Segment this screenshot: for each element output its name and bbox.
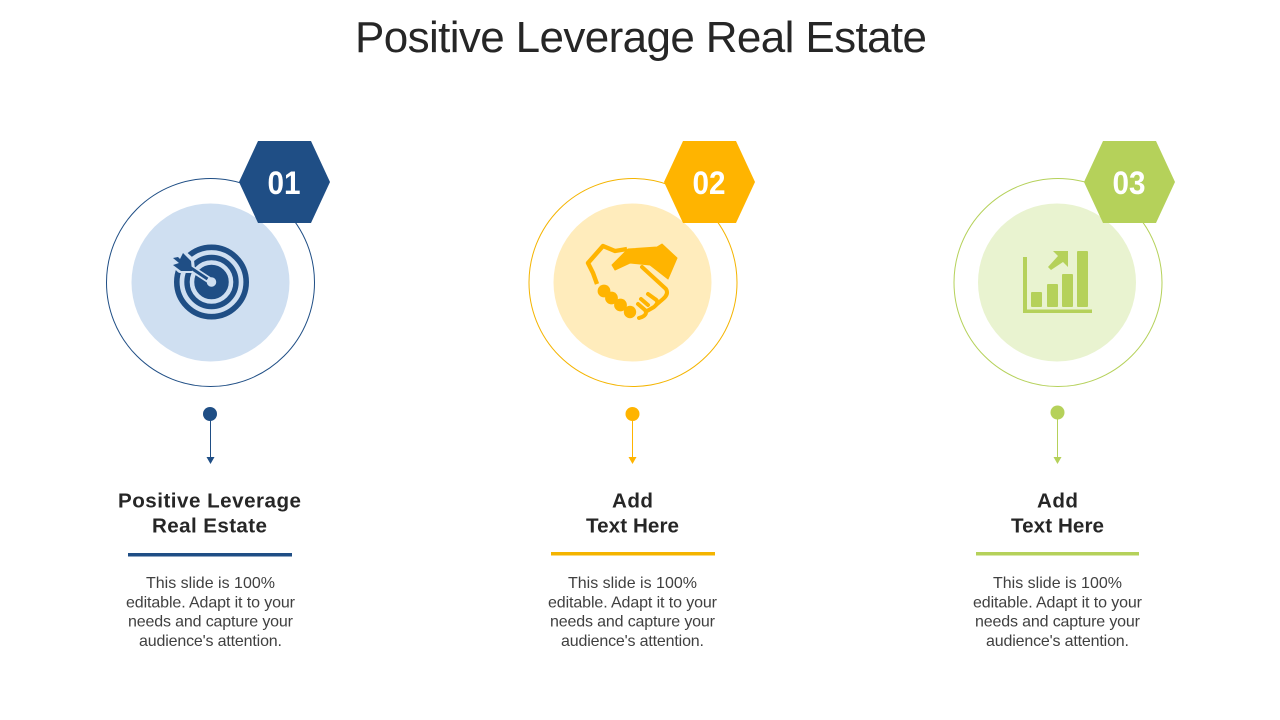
- hexagon badge 01: 01: [268, 165, 300, 201]
- body text 1: editable. Adapt it to your: [126, 594, 296, 612]
- icon: handshake: [588, 244, 677, 318]
- body text 2: audience's attention.: [561, 633, 704, 650]
- body text 1: audience's attention.: [139, 633, 282, 650]
- inner disc 1: [132, 204, 290, 362]
- body text 3: audience's attention.: [986, 633, 1129, 650]
- heading 2: [586, 490, 679, 538]
- hexagon badge 02: 02: [692, 165, 726, 201]
- inner disc 2: [554, 204, 712, 362]
- panel: column 1: [106, 141, 330, 650]
- outer ring 1: [106, 178, 314, 386]
- heading 3: Add: [1037, 490, 1078, 512]
- heading 3: [1011, 490, 1104, 538]
- body text 3: editable. Adapt it to your: [973, 594, 1143, 612]
- heading 2: Text Here: [586, 514, 679, 538]
- heading 1: [118, 490, 301, 538]
- underline 3: [976, 552, 1139, 556]
- title: Positive Leverage Real Estate: [355, 13, 927, 62]
- connector: dot and arrow 3: [1050, 406, 1064, 464]
- body text 2: This slide is 100%: [568, 575, 697, 592]
- body text 1: [126, 575, 296, 650]
- panel: column 3: [954, 141, 1175, 650]
- underline 1: [128, 553, 292, 556]
- body text 3: [973, 575, 1143, 650]
- hexagon badge 02: [664, 141, 755, 223]
- connector: dot and arrow 2: [626, 407, 640, 464]
- body text 2: [548, 575, 718, 650]
- icon: rising bar chart: [1023, 251, 1092, 313]
- heading 3: Text Here: [1011, 514, 1104, 538]
- inner disc 3: [978, 204, 1136, 362]
- heading 2: Add: [612, 490, 653, 512]
- body text 2: needs and capture your: [550, 614, 716, 630]
- connector: dot and arrow 1: [203, 407, 217, 464]
- outer ring 3: [954, 178, 1162, 386]
- hexagon badge 01: [239, 141, 330, 223]
- heading 1: Real Estate: [152, 514, 267, 538]
- outer ring 2: [529, 178, 737, 386]
- icon: target with arrow: [173, 247, 246, 317]
- body text 2: editable. Adapt it to your: [548, 594, 718, 612]
- panel: column 2: [529, 141, 755, 650]
- heading 1: Positive Leverage: [118, 490, 301, 512]
- body text 1: This slide is 100%: [146, 575, 275, 592]
- underline 2: [551, 552, 715, 556]
- body text 3: needs and capture your: [975, 614, 1141, 630]
- body text 3: This slide is 100%: [993, 575, 1122, 592]
- hexagon badge 03: [1084, 141, 1175, 223]
- body text 1: needs and capture your: [128, 614, 294, 630]
- hexagon badge 03: 03: [1112, 165, 1146, 201]
